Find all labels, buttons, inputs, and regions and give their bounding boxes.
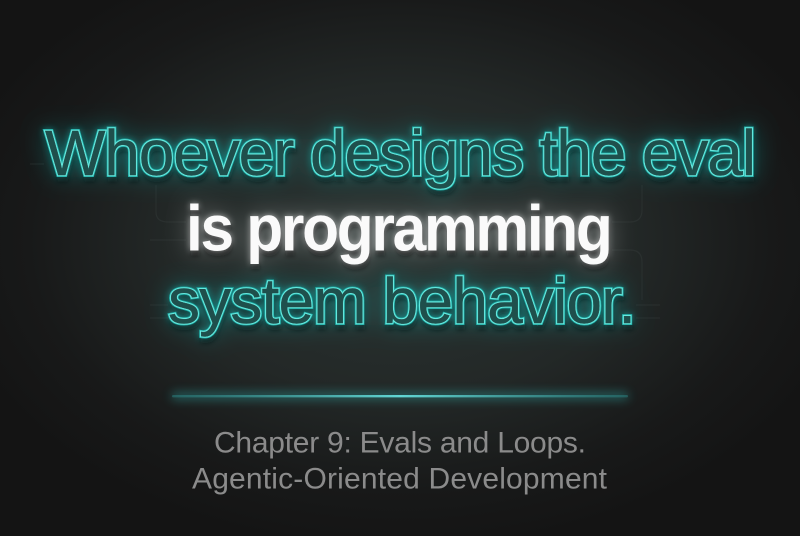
line 1: Whoever designs the eval: Whoever designs the eval	[45, 117, 756, 189]
line 1: Whoever designs the eval: Whoever designs the eval	[45, 117, 756, 189]
line 3: system behavior.: system behavior.	[169, 270, 637, 342]
line 2: is programming: is programming	[187, 198, 614, 270]
line 1: Whoever designs the eval: Whoever designs the eval	[46, 122, 757, 194]
subtitle: Agentic-Oriented Development	[192, 462, 608, 496]
subtitle	[192, 426, 608, 496]
line 2: is programming: is programming	[186, 193, 613, 265]
headline	[45, 117, 757, 342]
line 3: system behavior.: system behavior.	[168, 265, 636, 337]
line 2: is programming: is programming	[186, 193, 613, 265]
line 1: Whoever designs the eval: Whoever designs the eval	[45, 117, 756, 189]
divider rule	[172, 393, 628, 399]
line 3: system behavior.: system behavior.	[168, 265, 636, 337]
background wiring	[30, 164, 660, 318]
subtitle: Chapter 9: Evals and Loops.	[214, 426, 586, 460]
line 1: Whoever designs the eval: Whoever designs the eval	[45, 117, 756, 189]
line 3: system behavior.: system behavior.	[168, 265, 636, 337]
line 3: system behavior.: system behavior.	[168, 265, 636, 337]
line 3: system behavior.: system behavior.	[168, 265, 636, 337]
line 1: Whoever designs the eval: Whoever designs the eval	[45, 117, 756, 189]
line 2: is programming: is programming	[186, 193, 613, 265]
